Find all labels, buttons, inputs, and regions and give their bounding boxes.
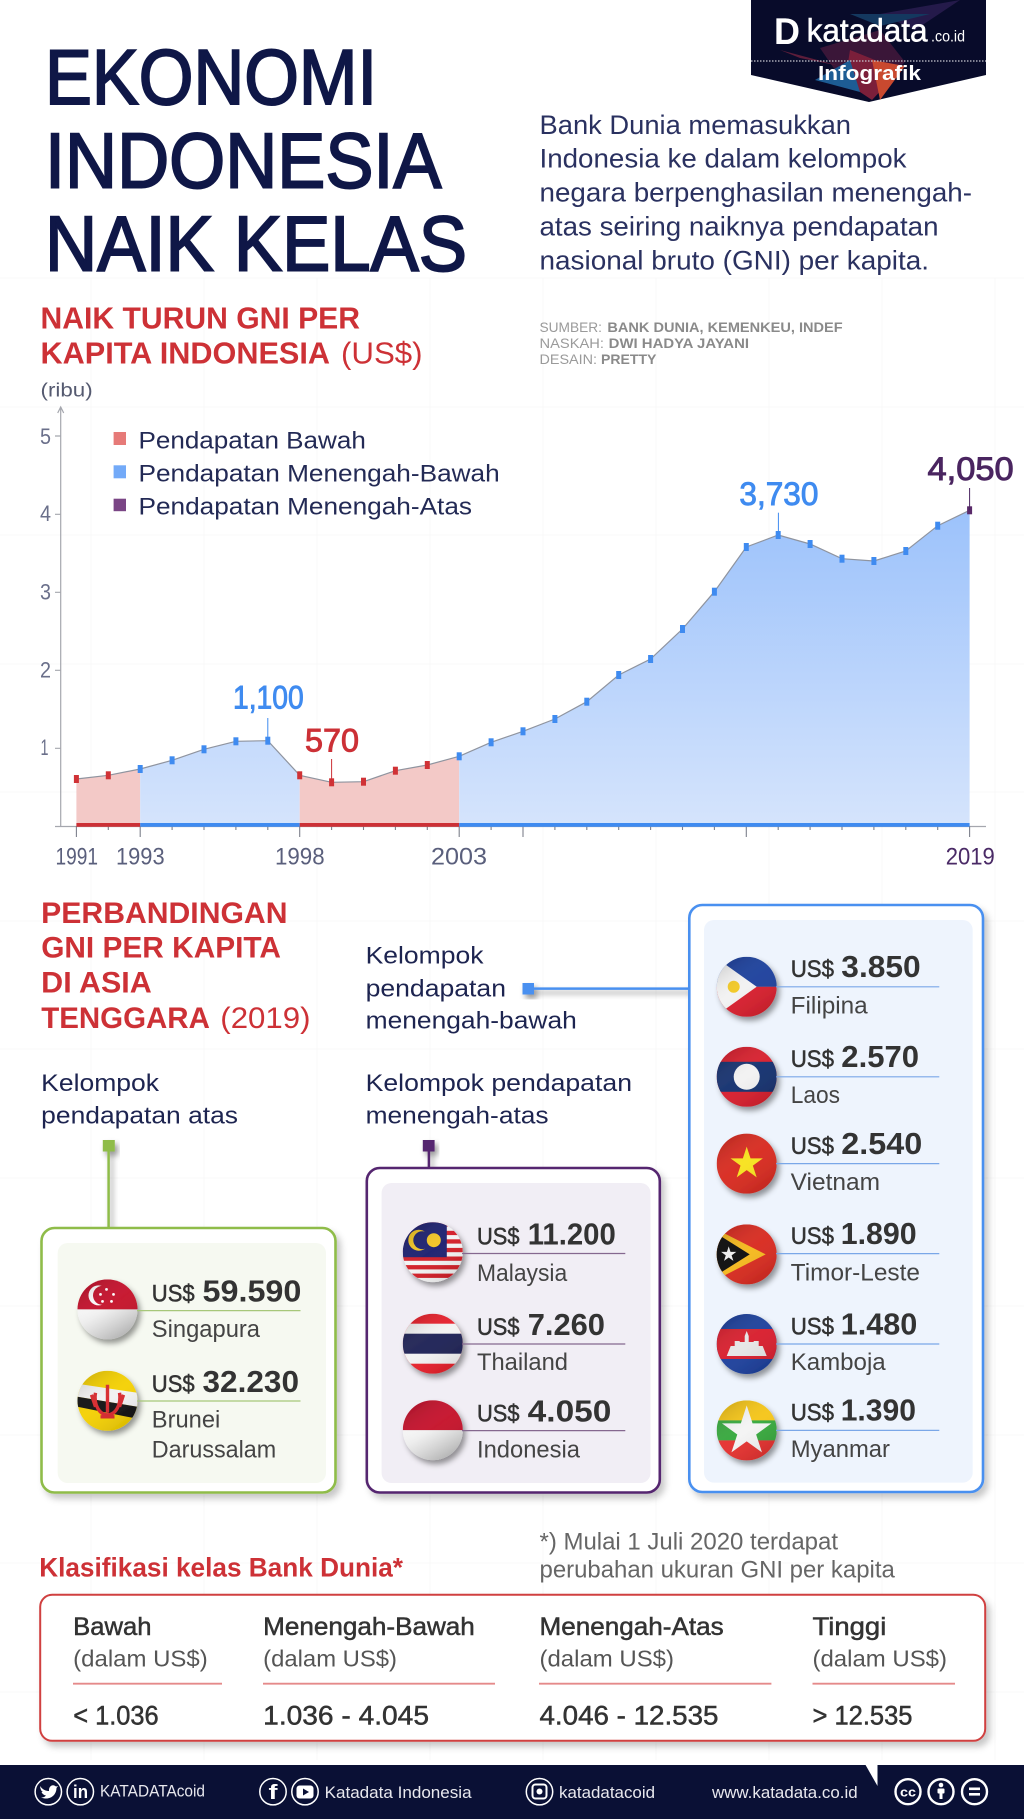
flag: Singapore	[78, 1279, 138, 1339]
data line	[76, 510, 970, 782]
footnote: *) Mulai 1 Juli 2020 terdapat	[540, 1528, 838, 1555]
logo badge: .co.id	[931, 29, 965, 46]
heading: ASEAN comparison: TENGGARA	[41, 1002, 210, 1035]
title: NAIK KELAS	[45, 200, 467, 288]
connector: purple	[423, 1140, 435, 1168]
handle: katadatacoid: katadatacoid	[559, 1783, 655, 1802]
value: Myanmar: US$	[791, 1400, 834, 1427]
logo badge	[751, 0, 986, 102]
heading: ASEAN comparison	[41, 897, 310, 1035]
icon: instagram	[526, 1778, 553, 1805]
website: www.katadata.co.id	[711, 1783, 858, 1802]
flag: Cambodia	[717, 1314, 777, 1374]
footnote: perubahan ukuran GNI per kapita	[540, 1557, 895, 1584]
value: Cambodia	[776, 1306, 939, 1376]
value: Thailand: US$	[477, 1314, 520, 1341]
credits: SUMBER:	[540, 319, 602, 335]
value: Philippines: Filipina	[791, 992, 868, 1019]
label: lower-middle income	[366, 943, 577, 1035]
value: Cambodia: 1.480	[841, 1306, 917, 1341]
flag: Laos	[717, 1047, 777, 1107]
legend: Pendapatan Menengah-Bawah	[138, 461, 500, 488]
value: Vietnam: US$	[791, 1133, 834, 1160]
callout: 3,730	[739, 476, 818, 535]
icon: attribution	[928, 1779, 954, 1804]
credits: BANK DUNIA, KEMENKEU, INDEF	[607, 319, 843, 335]
credits: DWI HADYA JAYANI	[609, 335, 749, 351]
value: Myanmar: 1.390	[841, 1393, 916, 1428]
label: high income: Kelompok	[41, 1070, 160, 1097]
column: Bawah	[73, 1613, 222, 1730]
axes	[55, 407, 986, 826]
value: Laos: US$	[791, 1046, 834, 1073]
value: Thailand: Thailand	[477, 1349, 568, 1376]
income class bar	[76, 823, 970, 827]
y axis labels: 2	[40, 658, 51, 683]
value: Indonesia: Indonesia	[477, 1437, 581, 1464]
panel: classification table	[40, 1595, 985, 1741]
icon: facebook: f	[268, 1782, 278, 1804]
column: Menengah-Atas: Menengah-Atas	[540, 1613, 724, 1641]
value: Vietnam: Vietnam	[791, 1169, 880, 1196]
icon: linkedin: in	[73, 1782, 88, 1802]
x axis labels: 2019	[946, 843, 995, 870]
heading: World Bank classes: Klasifikasi kelas Bank Dunia*	[39, 1553, 404, 1583]
legend	[114, 427, 500, 520]
value: Philippines: US$	[791, 956, 834, 983]
callout: 1,100: 1,100	[233, 679, 304, 715]
handle: Katadata Indonesia: Katadata Indonesia	[325, 1783, 472, 1802]
label: upper-middle income: menengah-atas	[366, 1103, 549, 1130]
connector: blue	[522, 983, 690, 994]
data point markers	[74, 506, 972, 786]
x axis labels: 2003	[431, 843, 487, 870]
value: Timor-Leste: Timor-Leste	[791, 1260, 920, 1286]
y axis labels	[40, 424, 51, 760]
credits: NASKAH:	[540, 335, 604, 351]
value: Cambodia: US$	[791, 1313, 834, 1340]
intro paragraph: atas seiring naiknya pendapatan	[540, 211, 938, 241]
y axis labels: 3	[40, 579, 51, 604]
value: Brunei: US$	[152, 1371, 195, 1398]
logo badge: D	[774, 11, 800, 52]
heading: ASEAN comparison: (2019)	[220, 1002, 310, 1035]
flag: Myanmar	[717, 1400, 777, 1460]
column: Tinggi	[812, 1613, 955, 1730]
intro paragraph	[540, 110, 972, 275]
column: Bawah: (dalam US$)	[73, 1646, 208, 1672]
credits	[540, 319, 843, 367]
label: upper-middle income	[366, 1070, 632, 1130]
legend: Pendapatan Bawah	[138, 427, 366, 454]
value: Cambodia: Kamboja	[791, 1349, 886, 1376]
legend: Pendapatan Menengah-Atas	[138, 493, 472, 520]
column: Tinggi: Tinggi	[812, 1613, 886, 1641]
callout: 570	[305, 723, 359, 782]
value: Timor-Leste	[776, 1216, 939, 1286]
value: Myanmar: Myanmar	[791, 1436, 890, 1463]
y axis labels: 5	[40, 424, 51, 449]
value: Timor-Leste: 1.890	[841, 1216, 917, 1251]
flag: Brunei	[78, 1371, 138, 1431]
flag: Malaysia	[403, 1222, 463, 1282]
x axis labels: 1998	[275, 843, 325, 870]
label: high income: pendapatan atas	[41, 1103, 238, 1130]
x axis labels: 1991	[56, 843, 98, 870]
value: Laos	[776, 1039, 939, 1109]
value: Indonesia	[462, 1394, 625, 1464]
column: Tinggi: > 12.535	[812, 1700, 912, 1730]
column: Menengah-Bawah: Menengah-Bawah	[263, 1613, 475, 1641]
title: EKONOMI	[45, 33, 377, 121]
value: Singapore: Singapura	[152, 1316, 261, 1343]
column: Menengah-Atas	[539, 1613, 771, 1730]
y axis labels: 1	[40, 735, 48, 760]
column: Menengah-Bawah: 1.036 - 4.045	[263, 1700, 429, 1730]
value: Myanmar	[776, 1393, 939, 1463]
heading: GNI chart: NAIK TURUN GNI PER	[40, 301, 360, 335]
y axis labels: 4	[40, 501, 51, 526]
heading: ASEAN comparison: DI ASIA	[41, 967, 152, 1000]
icon: no derivatives	[962, 1779, 987, 1804]
value: Malaysia: 11.200	[528, 1216, 616, 1252]
panel: upper-middle income	[367, 1168, 660, 1492]
flag: Philippines	[715, 957, 777, 1017]
value: Indonesia: US$	[477, 1401, 520, 1428]
x axis labels: 1993	[116, 843, 165, 870]
column: Menengah-Atas: (dalam US$)	[540, 1646, 674, 1672]
flag: Thailand	[403, 1314, 463, 1374]
area fills	[76, 510, 970, 826]
logo badge: katadata	[807, 13, 928, 49]
value: Singapore: US$	[152, 1281, 195, 1308]
panel: lower-middle income	[689, 905, 983, 1492]
logo badge: Infografik	[818, 63, 922, 85]
value: Vietnam	[776, 1126, 939, 1196]
icon: youtube	[292, 1778, 318, 1805]
credits: DESAIN:	[540, 351, 597, 367]
title: INDONESIA	[45, 116, 442, 204]
icon: linkedin	[67, 1778, 94, 1805]
value: Brunei: Darussalam	[152, 1437, 276, 1464]
label: lower-middle income: menengah-bawah	[366, 1008, 577, 1035]
value: Laos: Laos	[791, 1082, 840, 1109]
callout: 3,730: 3,730	[739, 476, 818, 512]
label: lower-middle income: Kelompok	[366, 943, 485, 970]
value: Brunei: Brunei	[152, 1406, 220, 1433]
column: Menengah-Bawah	[263, 1613, 495, 1730]
icon: facebook	[260, 1778, 286, 1805]
callout: 4,050: 4,050	[928, 451, 1014, 487]
connector: green	[103, 1140, 115, 1228]
value: Brunei: 32.230	[202, 1364, 299, 1399]
value: Philippines	[776, 949, 939, 1019]
value: Thailand: 7.260	[528, 1307, 605, 1342]
column: Tinggi: (dalam US$)	[812, 1646, 947, 1672]
value: Brunei	[137, 1364, 300, 1464]
column: Bawah: < 1.036	[73, 1700, 159, 1730]
heading: GNI chart: (US$)	[341, 336, 423, 370]
x axis ticks	[76, 826, 970, 837]
icon: twitter	[35, 1778, 62, 1805]
callout: 1,100	[233, 679, 304, 740]
value: Laos: 2.570	[841, 1039, 919, 1074]
intro paragraph: Indonesia ke dalam kelompok	[540, 144, 907, 174]
credits: PRETTY	[601, 351, 657, 367]
flag: Indonesia	[403, 1400, 463, 1460]
footnote	[540, 1528, 895, 1584]
x axis labels	[56, 843, 995, 870]
heading: ASEAN comparison: GNI PER KAPITA	[41, 932, 281, 965]
flag: Timor-Leste	[715, 1224, 777, 1284]
callout: 570: 570	[305, 723, 359, 759]
value: Malaysia	[462, 1216, 625, 1287]
value: Indonesia: 4.050	[528, 1394, 611, 1429]
label: high income	[41, 1070, 238, 1130]
value: Singapore: 59.590	[202, 1274, 301, 1309]
chart: GNI per capita	[40, 381, 1014, 870]
intro paragraph: negara berpenghasilan menengah-	[540, 178, 972, 208]
icon: creative commons: cc	[900, 1784, 916, 1800]
intro paragraph: nasional bruto (GNI) per kapita.	[540, 245, 929, 275]
value: Malaysia: US$	[477, 1224, 520, 1250]
callout: 4,050	[928, 451, 1014, 510]
column: Menengah-Atas: 4.046 - 12.535	[540, 1700, 718, 1730]
value: Timor-Leste: US$	[791, 1223, 834, 1250]
flag: Vietnam	[717, 1134, 777, 1194]
column: Bawah: Bawah	[73, 1613, 152, 1641]
panel: high income	[42, 1228, 336, 1492]
value: Singapore	[137, 1274, 301, 1343]
label: upper-middle income: Kelompok pendapatan	[366, 1070, 632, 1097]
footer	[0, 1764, 1024, 1819]
value: Thailand	[462, 1307, 625, 1376]
title	[45, 33, 467, 288]
value: Malaysia: Malaysia	[477, 1260, 568, 1287]
column: Menengah-Bawah: (dalam US$)	[263, 1646, 397, 1672]
handle: KATADATAcoid: KATADATAcoid	[100, 1782, 205, 1801]
unit label: (ribu)	[40, 381, 93, 402]
label: lower-middle income: pendapatan	[366, 975, 506, 1002]
heading: ASEAN comparison: PERBANDINGAN	[41, 897, 288, 930]
heading: GNI chart: KAPITA INDONESIA	[40, 336, 330, 370]
icon: creative commons	[896, 1779, 920, 1804]
heading: GNI chart	[40, 301, 423, 370]
intro paragraph: Bank Dunia memasukkan	[540, 110, 851, 140]
value: Vietnam: 2.540	[841, 1126, 922, 1161]
value: Philippines: 3.850	[841, 949, 921, 984]
